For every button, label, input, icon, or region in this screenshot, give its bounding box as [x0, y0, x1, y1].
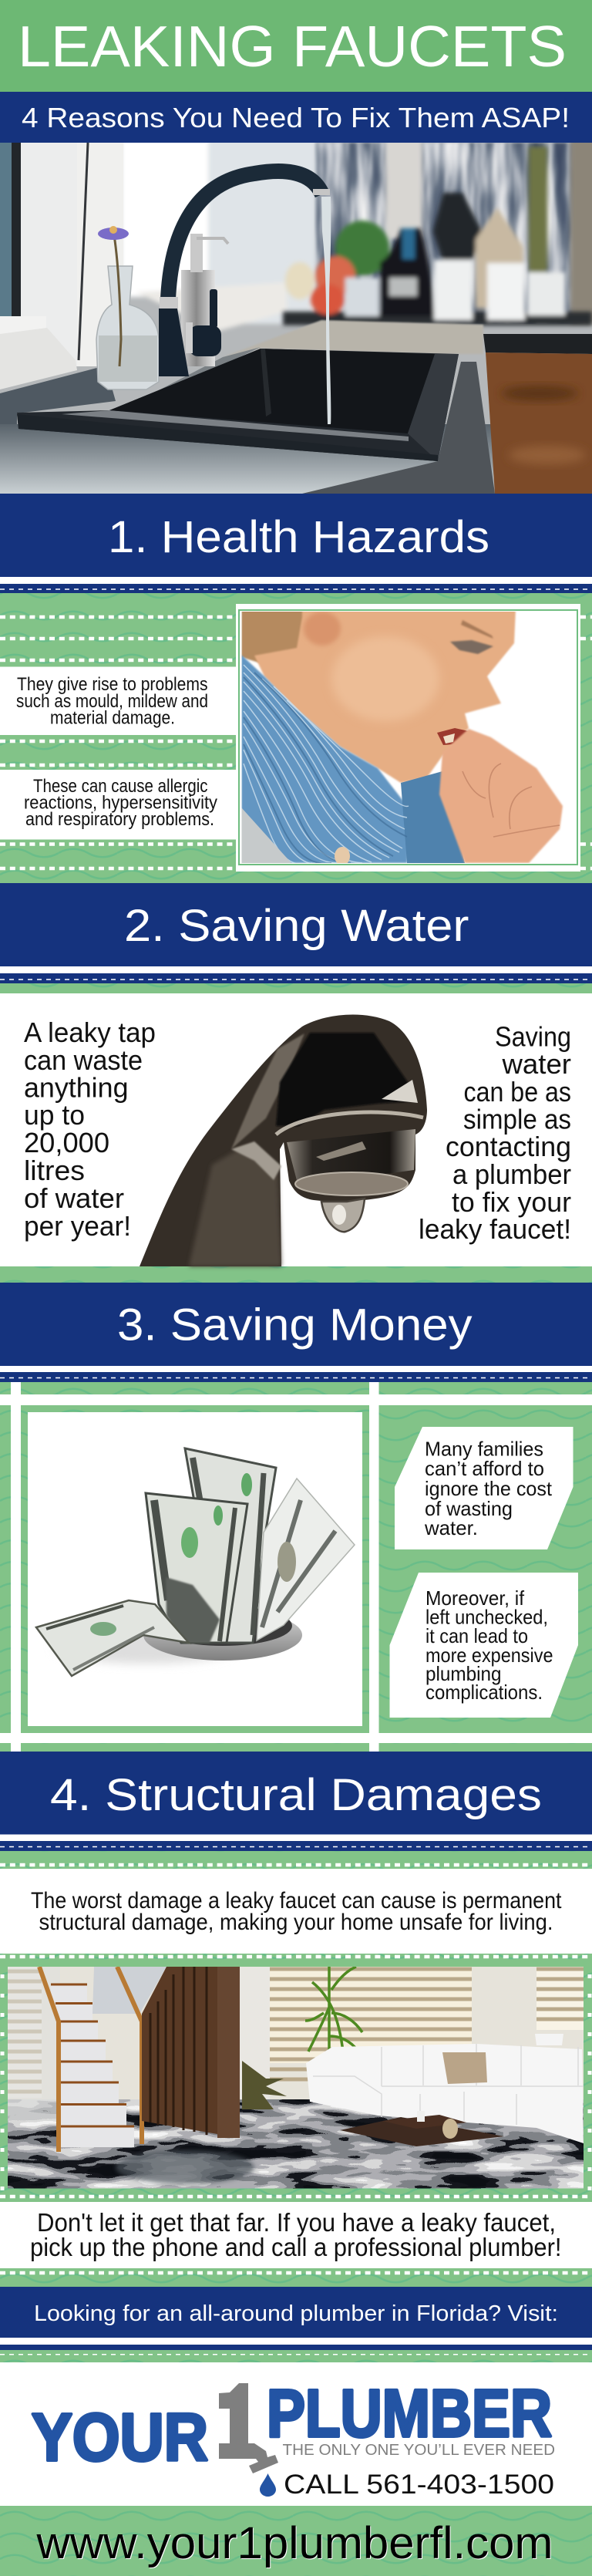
phone number: CALL 561-403-1500	[284, 2470, 554, 2500]
left text block: can waste	[24, 1044, 143, 1076]
text box: problems: They give rise to problems	[17, 674, 208, 695]
text box: problems: material damage.	[50, 708, 175, 728]
bill right	[257, 1479, 355, 1640]
shadow	[54, 1630, 239, 1664]
heading text: 4. Structural Damages	[50, 1770, 542, 1820]
callout: plumbing complications: Moreover, if	[426, 1586, 525, 1610]
hand	[439, 729, 563, 863]
logo: Your 1 Plumber	[32, 2376, 555, 2500]
right text block: simple as	[463, 1103, 571, 1135]
callout: cost of wasting water: water.	[424, 1516, 478, 1539]
callout: cost of wasting water: Many families	[425, 1438, 543, 1461]
text block: permanent structural damage	[0, 1869, 592, 1954]
drain	[143, 1610, 302, 1661]
title banner	[0, 0, 592, 92]
text box: allergic reactions: and respiratory problems.	[25, 809, 214, 830]
call to action banner	[0, 2287, 592, 2338]
photo: flooded living room	[8, 1967, 584, 2189]
text box: allergic reactions: reactions, hypersensitivity	[24, 793, 217, 813]
logo word PLUMBER: PLUMBER	[267, 2376, 552, 2451]
subtitle text: 4 Reasons You Need To Fix Them ASAP!	[22, 102, 570, 133]
right text block	[419, 1021, 571, 1245]
logo tagline: THE ONLY ONE YOU’LL EVER NEED	[282, 2442, 555, 2459]
photo: woman coughing	[241, 609, 574, 865]
callout: cost of wasting water: of wasting	[425, 1497, 513, 1520]
right text block: water	[501, 1048, 571, 1080]
left text block: anything	[24, 1072, 128, 1103]
navy divider strip	[0, 973, 592, 983]
callout: plumbing complications: plumbing	[426, 1662, 501, 1685]
bill front	[146, 1493, 247, 1643]
staircase	[8, 1967, 166, 2152]
text block: permanent structural damage: structural damage, making your home unsafe for living.	[39, 1910, 553, 1935]
water stream	[321, 197, 331, 424]
left text block: up to	[24, 1099, 85, 1131]
callout: plumbing complications: it can lead to	[426, 1624, 528, 1647]
right text block: to fix your	[452, 1186, 571, 1218]
countertop	[223, 320, 483, 357]
window blinds	[8, 1967, 584, 2098]
section heading: 4. Structural Damages	[0, 1752, 592, 1834]
callout: plumbing complications	[390, 1573, 578, 1718]
callout: cost of wasting water: ignore the cost	[425, 1477, 553, 1500]
panel: health hazards	[0, 593, 592, 883]
section heading: 1. Health Hazards	[0, 494, 592, 577]
navy divider strip	[0, 584, 592, 593]
scarf	[241, 655, 410, 863]
text box: problems	[0, 666, 236, 735]
text block: call a plumber: pick up the phone and call a professional plumber!	[30, 2233, 561, 2261]
website url: www.your1plumberfl.com	[35, 2518, 553, 2568]
heading text: 1. Health Hazards	[108, 512, 489, 562]
text box: allergic reactions	[0, 770, 241, 839]
photo: dollar bills going down a drain	[28, 1412, 362, 1726]
callout: cost of wasting water: can’t afford to	[425, 1457, 544, 1480]
right text block: can be as	[464, 1076, 571, 1108]
text box: allergic reactions: These can cause allergic	[33, 776, 208, 797]
logo word YOUR: YOUR	[32, 2400, 208, 2475]
panel: structural damages	[0, 1851, 592, 2287]
banner text: Looking for an all-around plumber in Florida? Visit:	[34, 2301, 558, 2326]
right text block: contacting	[446, 1131, 571, 1162]
bill back	[185, 1448, 276, 1643]
wood slat wall	[142, 1967, 240, 2138]
panel: saving water	[0, 983, 592, 1283]
left text block	[24, 1017, 156, 1242]
text box: problems: such as mould, mildew and	[16, 691, 208, 712]
left text block: 20,000	[24, 1127, 109, 1158]
photo frame	[236, 604, 580, 872]
mouth	[437, 728, 469, 745]
logo faucet numeral 1	[219, 2383, 278, 2473]
text block: call a plumber	[0, 2202, 592, 2268]
soap dispenser	[181, 234, 228, 366]
heading text: 2. Saving Water	[124, 901, 469, 951]
callout: plumbing complications: left unchecked,	[426, 1606, 548, 1629]
white sofa	[306, 2034, 584, 2143]
callout: cost of wasting water	[395, 1427, 574, 1549]
navy divider strip	[0, 1372, 592, 1382]
title text: LEAKING FAUCETS	[18, 14, 567, 79]
heading text: 3. Saving Money	[117, 1300, 472, 1350]
hair	[242, 612, 304, 663]
face and neck	[254, 609, 516, 783]
vase with flower	[96, 226, 159, 389]
sink	[17, 349, 459, 461]
coffee table	[340, 2111, 504, 2146]
text block: call a plumber: Don't let it get that far. If you have a leaky faucet,	[37, 2208, 556, 2237]
left text block: per year!	[24, 1210, 131, 1242]
faucet	[159, 171, 330, 376]
photo: dripping faucet	[140, 1015, 427, 1266]
wood cabinet	[483, 334, 592, 354]
icon: water drop	[260, 2473, 276, 2497]
subtitle banner	[0, 92, 592, 143]
section heading: 3. Saving Money	[0, 1283, 592, 1366]
panel: saving money	[0, 1382, 592, 1752]
bill low left	[36, 1600, 189, 1676]
section heading: 2. Saving Water	[0, 883, 592, 966]
footer band with website	[0, 2506, 592, 2576]
navy divider strip	[0, 1841, 592, 1851]
right text block: a plumber	[452, 1158, 571, 1190]
photo: kitchen faucet running	[0, 139, 592, 494]
potted plant	[242, 1967, 362, 2109]
left text block: litres	[24, 1155, 85, 1186]
right text block: leaky faucet!	[419, 1213, 571, 1245]
left text block: A leaky tap	[24, 1017, 156, 1048]
left text block: of water	[24, 1182, 124, 1214]
shirt	[241, 808, 291, 863]
background objects on the counter	[283, 147, 592, 325]
eye and brow	[450, 640, 493, 654]
right text block: Saving	[495, 1021, 571, 1052]
flood water	[8, 2099, 584, 2189]
navy divider strip	[0, 2345, 592, 2362]
callout: plumbing complications: complications.	[426, 1681, 543, 1704]
callout: plumbing complications: more expensive	[426, 1644, 553, 1667]
